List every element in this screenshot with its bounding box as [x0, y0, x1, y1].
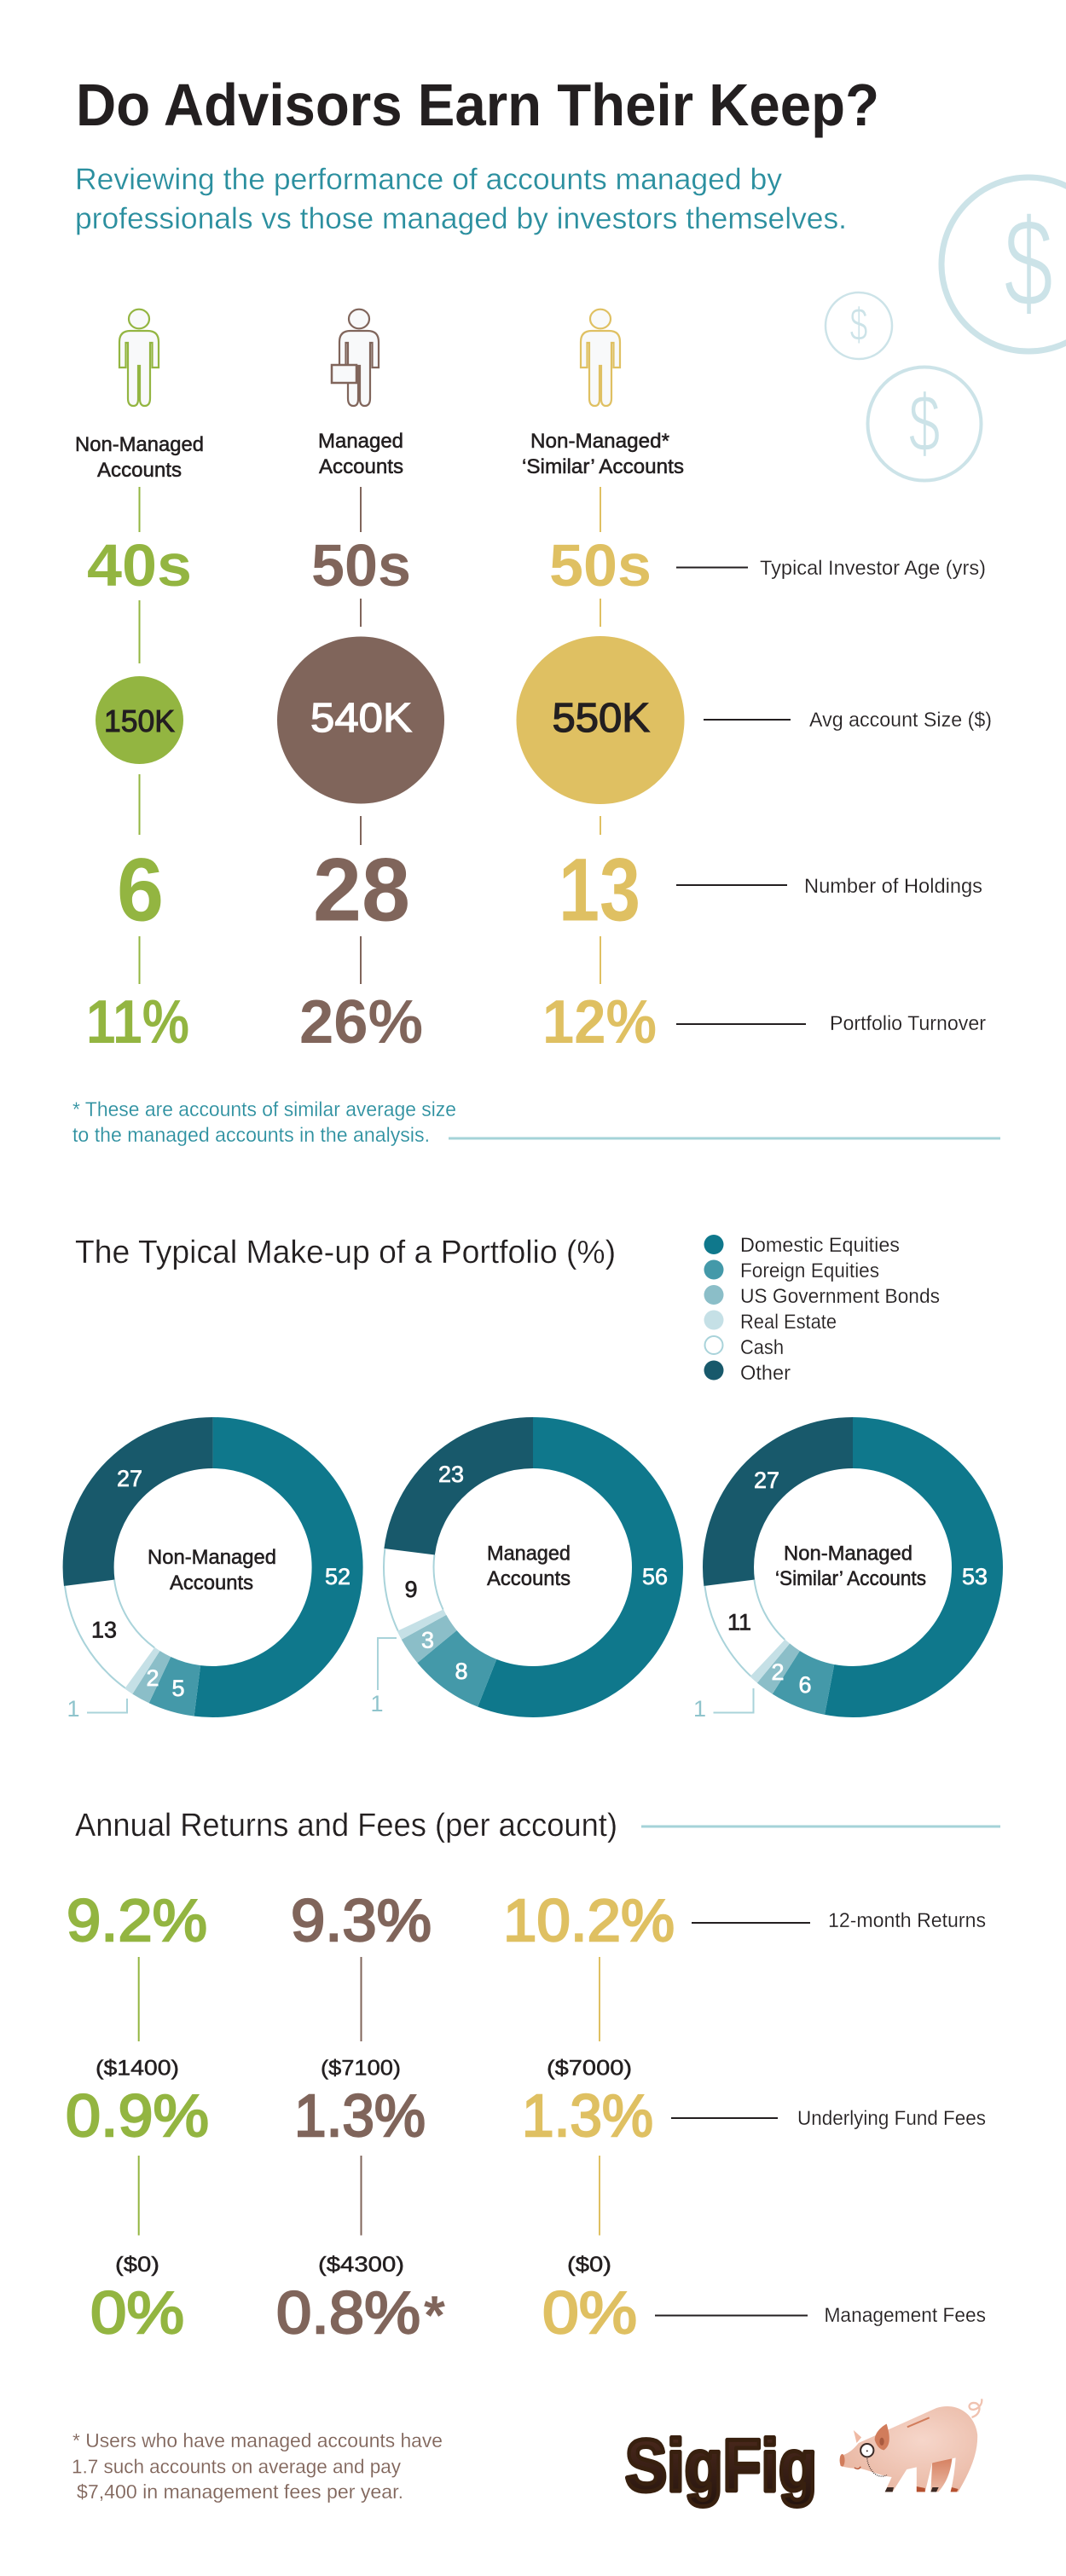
donut chart: non-managed accounts: Non-Managed — [148, 1546, 276, 1569]
donut chart: managed accounts: Accounts — [487, 1567, 571, 1590]
legend: Real Estate — [740, 1311, 837, 1334]
legend: US Government Bonds — [740, 1285, 940, 1308]
stat row: 12-month returns: 9.3% — [291, 1887, 432, 1954]
legend: Cash — [740, 1336, 784, 1359]
footnote: similar accounts: to the managed accounts in the analysis. — [72, 1124, 430, 1147]
stat row: 12-month returns — [67, 1887, 986, 1954]
stat row: portfolio turnover: 12% — [542, 988, 657, 1056]
footnote: similar accounts — [72, 1098, 456, 1147]
stat row: typical investor age: 50s — [549, 532, 652, 599]
donut chart: non-managed accounts: 2 — [146, 1665, 159, 1691]
donut chart: non-managed accounts: 5 — [171, 1676, 185, 1701]
column heading: managed accounts: Accounts — [319, 455, 403, 478]
legend: Other — [740, 1362, 791, 1385]
donut chart: similar non-managed accounts — [693, 1418, 1002, 1722]
column heading: non-managed accounts: Accounts — [97, 459, 182, 482]
donut chart: managed accounts: 56 — [642, 1564, 668, 1589]
donut chart: managed accounts: 3 — [421, 1627, 434, 1653]
stat row: underlying fund fees: ($1400) — [96, 2057, 179, 2081]
footnote: management fee accounts: * Users who have managed accounts have — [72, 2429, 443, 2452]
stat row: typical investor age: 50s — [311, 532, 411, 599]
stat row: typical investor age: 40s — [87, 532, 192, 599]
donut chart: managed accounts: 23 — [438, 1462, 464, 1487]
donut chart: managed accounts: 8 — [455, 1658, 468, 1684]
stat row: management fees: Management Fees — [824, 2304, 986, 2327]
donut chart: managed accounts: 1 — [370, 1691, 384, 1716]
donut chart: non-managed accounts: Accounts — [170, 1572, 253, 1595]
stat row: average account size bubbles: 540K — [310, 696, 412, 741]
icon: medium dollar coin: $ — [909, 378, 940, 469]
logo: SigFig wordmark: SigFig — [625, 2425, 817, 2507]
stat row: portfolio turnover: 11% — [86, 988, 189, 1056]
stat row: portfolio turnover: Portfolio Turnover — [830, 1012, 986, 1035]
donut chart: similar non-managed accounts: 2 — [771, 1659, 785, 1685]
stat row: management fees — [90, 2253, 986, 2346]
icon: non-managed person — [119, 310, 159, 406]
stat row: underlying fund fees: Underlying Fund Fees — [797, 2107, 986, 2130]
donut chart: non-managed accounts — [64, 1418, 362, 1722]
donut chart: non-managed accounts: 1 — [67, 1696, 80, 1722]
column heading: non-managed accounts: Non-Managed — [75, 433, 204, 456]
icon: large dollar coin — [941, 177, 1066, 351]
icon: similar non-managed person — [581, 310, 620, 406]
stat row: portfolio turnover — [86, 988, 986, 1056]
stat row: number of holdings — [117, 841, 982, 940]
stat row: average account size bubbles — [96, 636, 992, 804]
footnote: management fee accounts: $7,400 in management fees per year. — [77, 2480, 403, 2503]
donut chart: managed accounts — [370, 1418, 682, 1716]
stat row: 12-month returns: 9.2% — [67, 1887, 207, 1954]
stat row: underlying fund fees: 1.3% — [294, 2082, 426, 2149]
stat row: portfolio turnover: 26% — [299, 988, 423, 1056]
footnote: similar accounts: * These are accounts of similar average size — [72, 1098, 456, 1121]
stat row: average account size bubbles: Avg account Size ($) — [809, 709, 992, 732]
icon: small dollar coin: $ — [849, 298, 868, 351]
donut chart: similar non-managed accounts: Non-Managed — [784, 1542, 912, 1566]
stat row: underlying fund fees: ($7000) — [547, 2057, 632, 2081]
stat row: management fees: 0% — [542, 2279, 637, 2346]
donut chart: non-managed accounts: 52 — [325, 1564, 351, 1589]
column heading: similar non-managed accounts: ‘Similar’ Accounts — [522, 455, 684, 478]
column heading: similar non-managed accounts: Non-Managed* — [530, 430, 669, 453]
stat row: average account size bubbles: 150K — [104, 703, 175, 738]
stat row: typical investor age: Typical Investor Age (yrs) — [760, 557, 986, 580]
stat row: underlying fund fees: 0.9% — [66, 2082, 209, 2149]
stat row: number of holdings: Number of Holdings — [804, 875, 982, 898]
stat row: average account size bubbles: 550K — [553, 696, 650, 741]
icon: managed person with briefcase — [332, 310, 379, 406]
donut chart: managed accounts: Managed — [487, 1542, 571, 1566]
stat row: 12-month returns: 12-month Returns — [828, 1909, 986, 1932]
stat row: management fees: * — [424, 2284, 445, 2346]
stat row: management fees: ($0) — [115, 2253, 159, 2277]
subtitle: Reviewing the performance of accounts managed by — [75, 163, 783, 196]
icon: piggy bank with monocle — [840, 2399, 982, 2492]
stat row: number of holdings: 28 — [313, 841, 410, 940]
stat row: management fees: ($4300) — [318, 2253, 404, 2277]
stat row: typical investor age — [87, 532, 986, 599]
stat row: management fees: ($0) — [567, 2253, 611, 2277]
column heading: managed accounts: Managed — [318, 430, 403, 453]
donut chart: non-managed accounts: 13 — [91, 1617, 117, 1642]
column heading: similar non-managed accounts — [522, 430, 684, 478]
heading: annual returns and fees: Annual Returns and Fees (per account) — [75, 1808, 617, 1844]
heading: typical make-up of a portfolio: The Typical Make-up of a Portfolio (%) — [75, 1235, 616, 1271]
column heading: managed accounts — [318, 430, 403, 478]
legend: Foreign Equities — [740, 1259, 879, 1282]
subtitle — [75, 163, 847, 235]
stat row: number of holdings: 6 — [117, 841, 164, 940]
stat row: management fees: 0.8% — [276, 2279, 420, 2346]
donut chart: similar non-managed accounts: 27 — [754, 1467, 779, 1493]
stat row: underlying fund fees: ($7100) — [321, 2057, 401, 2081]
footnote: management fee accounts: 1.7 such accounts on average and pay — [72, 2456, 401, 2478]
stat row: management fees: 0% — [90, 2279, 184, 2346]
donut chart: similar non-managed accounts: 53 — [962, 1564, 988, 1589]
icon: medium dollar coin — [868, 367, 981, 481]
donut chart: non-managed accounts: 27 — [117, 1466, 142, 1491]
column heading: non-managed accounts — [75, 433, 204, 482]
donut chart: similar non-managed accounts: 6 — [798, 1672, 812, 1698]
title: Do Advisors Earn Their Keep? — [76, 72, 879, 138]
subtitle: professionals vs those managed by investors themselves. — [75, 202, 847, 235]
footnote: management fee accounts — [72, 2429, 443, 2503]
stat row: underlying fund fees — [66, 2057, 986, 2149]
stat row: number of holdings: 13 — [559, 841, 640, 940]
donut chart: managed accounts: 9 — [404, 1577, 418, 1602]
donut chart: similar non-managed accounts: ‘Similar’ Accounts — [775, 1567, 926, 1590]
donut chart: similar non-managed accounts: 11 — [727, 1610, 751, 1635]
stat row: 12-month returns: 10.2% — [503, 1887, 675, 1954]
legend: Domestic Equities — [740, 1234, 900, 1257]
icon: small dollar coin — [826, 292, 892, 359]
donut chart: similar non-managed accounts: 1 — [693, 1696, 706, 1722]
legend — [704, 1234, 940, 1385]
stat row: underlying fund fees: 1.3% — [522, 2082, 653, 2149]
